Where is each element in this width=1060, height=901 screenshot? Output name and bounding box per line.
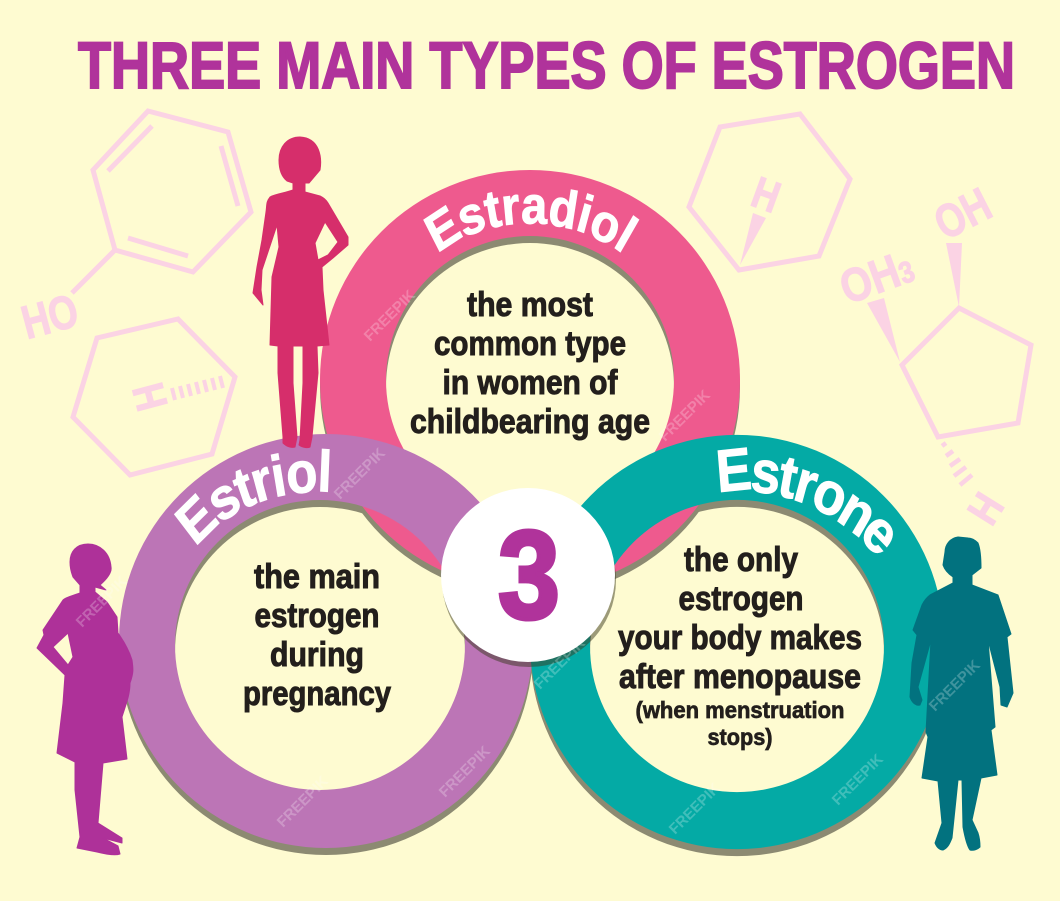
text: Estradiol description: childbearing age bbox=[410, 403, 650, 441]
molecule: right pentagon with OH groups: H bbox=[959, 485, 1014, 533]
watermarks: FREEPIK bbox=[73, 573, 131, 631]
text: Estradiol description: the most bbox=[467, 286, 593, 324]
molecule: right pentagon with OH groups: OH3 bbox=[833, 239, 920, 314]
text: Estradiol description: common type bbox=[434, 325, 626, 363]
ring: Estriol bbox=[119, 434, 533, 848]
text: Estrone description bbox=[618, 541, 862, 750]
text: Estriol description: pregnancy bbox=[243, 675, 391, 713]
watermarks: FREEPIK bbox=[361, 287, 419, 345]
center circle with number 3: 3 bbox=[498, 506, 560, 645]
molecule: upper-left ring with HO bbox=[16, 111, 251, 349]
molecule: right pentagon with OH groups: OH bbox=[926, 177, 999, 250]
heading: Estriol: Estriol bbox=[165, 439, 333, 557]
molecule: upper-right ring with H: H bbox=[745, 168, 787, 223]
molecule: upper-left ring with HO: HO bbox=[16, 283, 84, 349]
text: Estrone description: stops) bbox=[708, 724, 772, 750]
text: Estrone description: the only bbox=[684, 541, 798, 579]
watermarks: FREEPIK bbox=[436, 743, 494, 801]
center circle with number 3 bbox=[441, 488, 616, 667]
watermarks: FREEPIK bbox=[926, 657, 984, 715]
text: Estrone description: estrogen bbox=[678, 580, 804, 618]
watermarks bbox=[73, 287, 984, 838]
ring: Estradiol bbox=[320, 170, 740, 590]
heading: Estrone: Estrone bbox=[714, 435, 912, 568]
molecule: lower-left ring with H bbox=[73, 319, 235, 475]
text: Estrone description: (when menstruation bbox=[636, 697, 844, 723]
text: Estriol description bbox=[243, 558, 391, 713]
text: Estradiol description: in women of bbox=[442, 364, 618, 402]
text: Estriol description: the main bbox=[254, 558, 380, 596]
text: Estriol description: estrogen bbox=[254, 597, 380, 635]
watermarks: FREEPIK bbox=[331, 445, 389, 503]
watermarks: FREEPIK bbox=[666, 780, 724, 838]
molecule: upper-right ring with H bbox=[689, 114, 850, 270]
text: Estrone description: your body makes bbox=[618, 619, 862, 657]
watermarks: FREEPIK bbox=[531, 635, 589, 693]
ring: Estrone bbox=[530, 435, 944, 849]
watermarks: FREEPIK bbox=[829, 751, 887, 809]
molecule: lower-left ring with H: H bbox=[123, 378, 178, 416]
icon: woman silhouette on Estradiol ring bbox=[253, 137, 348, 448]
text: Estriol description: during bbox=[270, 636, 364, 674]
text: Estradiol description bbox=[410, 286, 650, 441]
icon: older woman silhouette on Estrone ring bbox=[910, 537, 1013, 850]
text: Estrone description: after menopause bbox=[619, 658, 861, 696]
watermarks: FREEPIK bbox=[274, 773, 332, 831]
molecule: right pentagon with OH groups bbox=[833, 177, 1031, 533]
watermarks: FREEPIK bbox=[656, 387, 714, 445]
icon: pregnant woman silhouette on Estriol ring bbox=[37, 544, 133, 855]
heading: Estradiol: Estradiol bbox=[416, 176, 646, 264]
ring shadows bbox=[119, 177, 944, 856]
